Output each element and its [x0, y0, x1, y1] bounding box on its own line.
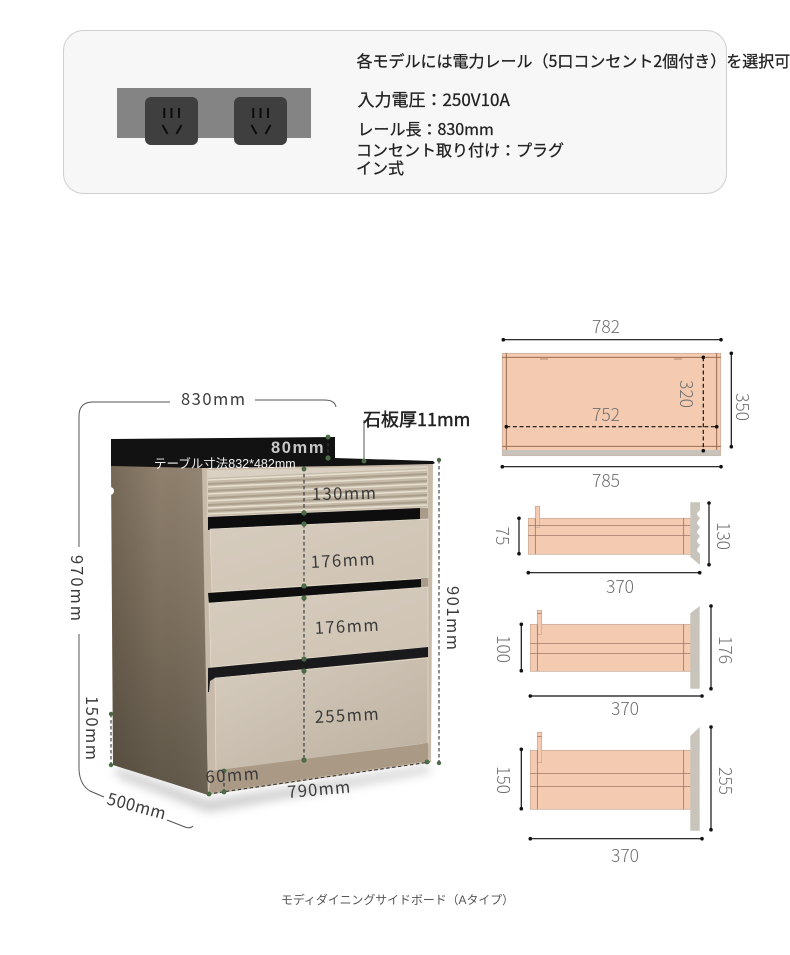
- side notch: [106, 487, 114, 495]
- diagram: drawer 3 section: 255: [713, 767, 738, 795]
- label: 901mm: 901mm: [442, 586, 466, 652]
- diagram: drawer 3 section: [491, 725, 738, 868]
- icon: socket 1: [145, 97, 198, 145]
- diagram: drawer 2 section: 100: [491, 635, 516, 663]
- text: rail length: レール長：830mm: [358, 116, 494, 140]
- numbers: 752: [592, 402, 620, 427]
- cabinet side panel: [111, 466, 208, 795]
- table size label: テーブル寸法832*482mm: [154, 456, 296, 471]
- label: 970mm: 970mm: [66, 555, 90, 623]
- diagram: top view: [500, 314, 755, 493]
- diagram: drawer 2 section: 370: [611, 696, 639, 721]
- drawer recess right 2: [421, 578, 428, 588]
- label: 790mm: 790mm: [286, 773, 352, 803]
- text: socket mounting: イン式: [356, 155, 404, 179]
- label: stone thickness: 石板厚11mm: [363, 406, 470, 432]
- label: 150mm: 150mm: [81, 696, 105, 762]
- text: socket mounting: コンセント取り付け：プラグ: [356, 137, 564, 161]
- diagram: drawer 1 section: 75: [490, 527, 515, 545]
- toe kick: [209, 743, 428, 793]
- cabinet front frame: [202, 464, 433, 795]
- diagram: drawer 2 section: 176: [713, 636, 738, 664]
- dimension lines: [500, 338, 733, 469]
- louvered top panel: [207, 466, 428, 517]
- text: input voltage: 入力電圧：250V10A: [358, 86, 510, 111]
- numbers: 320: [674, 380, 699, 408]
- floor shadow: [113, 766, 430, 812]
- icon: power rail strip with two sockets: [117, 88, 311, 145]
- diagram: drawer 3 section: 150: [491, 766, 516, 794]
- diagram: drawer 1 section: [490, 501, 736, 599]
- stone leader line: [363, 420, 365, 461]
- diagram: drawer 2 section: [491, 604, 738, 721]
- diagram: drawer 3 section: 370: [611, 843, 639, 868]
- depth bracket: [167, 820, 193, 828]
- drawer 1: [210, 519, 428, 592]
- diagram: drawer 1 section: 370: [606, 574, 634, 599]
- text: socket mounting: [356, 137, 564, 179]
- label: 176mm upper: 176mm: [310, 546, 377, 573]
- dimension markers on cabinet: [109, 435, 441, 796]
- label: 130mm: 130mm: [312, 480, 378, 505]
- panel: power rail: [64, 30, 790, 194]
- drawer gap 2: [208, 579, 421, 604]
- diagram: drawer 1 section: 130: [711, 522, 736, 550]
- label: 60mm: 60mm: [205, 760, 261, 788]
- label: 255mm: 255mm: [314, 701, 381, 728]
- black stone top and backsplash: [111, 437, 435, 468]
- drawer 2: [209, 587, 428, 667]
- drawer recess right 1: [420, 508, 428, 519]
- drawer gap 3: [208, 647, 428, 692]
- drawer 3: [215, 658, 428, 771]
- drawer gap 1: [208, 508, 420, 530]
- label: 500mm: 500mm: [105, 786, 169, 824]
- label: 830mm: 830mm: [181, 386, 247, 410]
- cabinet illustration: [106, 437, 435, 812]
- height bracket lower: [79, 634, 104, 797]
- icon: socket 2: [234, 97, 287, 145]
- drawer front, scalloped: [690, 502, 700, 565]
- text: rail note: 各モデルには電力レール（5口コンセント2個付き）を選択可: [356, 48, 790, 72]
- numbers: 350: [730, 393, 755, 421]
- numbers: 785: [592, 468, 620, 493]
- width bracket: [79, 400, 336, 547]
- numbers: [592, 314, 755, 493]
- label: backsplash height: 80mm: [271, 439, 325, 457]
- caption: モディダイニングサイドボード（Aタイプ）: [281, 893, 514, 907]
- label: 176mm lower: 176mm: [314, 612, 381, 639]
- numbers: 782: [592, 314, 620, 339]
